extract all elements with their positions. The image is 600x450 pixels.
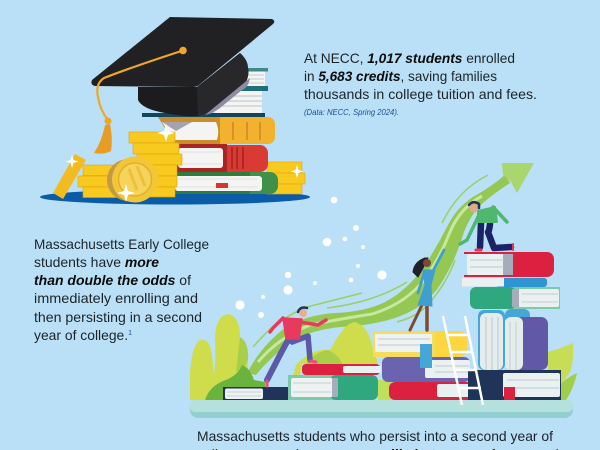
text: Early College odds: Massachusetts Early College bbox=[34, 236, 209, 252]
illustration: students climbing books along a rising arrow bbox=[190, 163, 577, 418]
text: Early College odds: 1 bbox=[128, 330, 132, 337]
floating dots bbox=[235, 197, 387, 318]
red book bbox=[177, 144, 268, 172]
large coin bbox=[107, 156, 158, 202]
text: persistence statement: Massachusetts students who persist into a second year of bbox=[197, 428, 553, 444]
cap board bbox=[91, 17, 274, 87]
text: Early College odds: immediately enrolling and bbox=[34, 290, 198, 306]
green book bbox=[175, 172, 278, 194]
text: NECC enrollment: At NECC, 1,017 students enrolled bbox=[304, 50, 515, 66]
rising arrow bbox=[247, 163, 534, 375]
illustration: graduation cap on books and coins bbox=[40, 17, 310, 204]
cap base bbox=[138, 53, 248, 116]
right coin stack bbox=[267, 162, 305, 194]
tassel bbox=[94, 47, 187, 154]
text: Early College odds: students have more bbox=[34, 254, 159, 270]
text: NECC enrollment: (Data: NECC, Spring 2024). bbox=[304, 108, 399, 117]
text: persistence statement bbox=[197, 428, 599, 450]
text: NECC enrollment: in 5,683 credits, saving families bbox=[304, 68, 497, 84]
text: Early College odds: year of college. bbox=[34, 327, 129, 343]
text: Early College odds bbox=[34, 236, 209, 343]
middle coin tower bbox=[129, 132, 182, 197]
sparkles bbox=[66, 124, 304, 202]
text: Early College odds: than double the odds of bbox=[34, 272, 191, 288]
book stack: right bbox=[462, 252, 561, 400]
yellow book bbox=[158, 117, 275, 144]
leaning coin bbox=[53, 154, 86, 199]
left coin stack bbox=[78, 165, 118, 198]
text: Early College odds: then persisting in a second bbox=[34, 309, 202, 325]
ladder bbox=[443, 316, 483, 405]
book stack: left bbox=[223, 364, 381, 400]
text: NECC enrollment bbox=[304, 50, 537, 117]
upper books bbox=[142, 68, 268, 117]
figure: man pulling up bbox=[460, 202, 513, 250]
text: NECC enrollment: thousands in college tuition and fees. bbox=[304, 86, 537, 102]
platform bbox=[190, 400, 573, 418]
plants bbox=[190, 314, 577, 400]
figure: woman reaching up bbox=[410, 250, 444, 330]
figure: runner bbox=[267, 308, 326, 386]
book stack: middle bbox=[373, 331, 473, 400]
